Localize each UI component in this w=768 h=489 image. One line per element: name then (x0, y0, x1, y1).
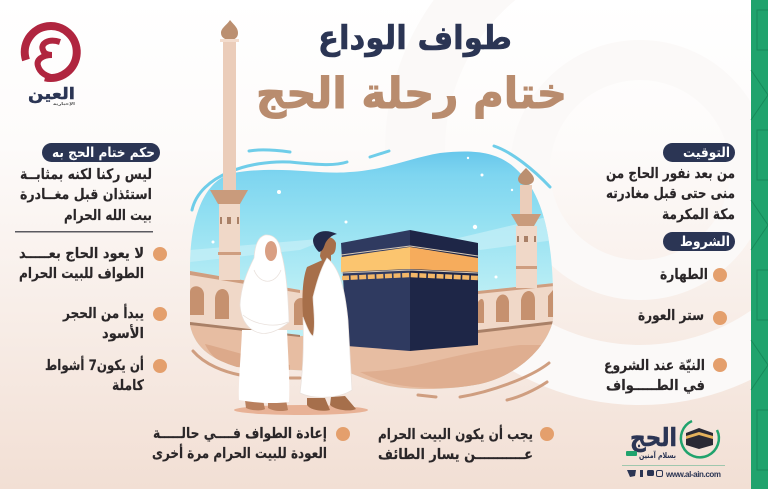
stars (212, 157, 513, 278)
title line 1: طواف الوداع (318, 18, 512, 58)
wall arches (190, 286, 553, 325)
icon: Kaaba in ring (681, 421, 719, 457)
pill heading: conditions: الشروط (680, 234, 730, 250)
shadow (234, 405, 368, 415)
item: starts from black stone: الأسود (102, 324, 144, 342)
timing text (606, 166, 735, 223)
item: no return after tawaf: لا يعود الحاج بعـــــد (19, 246, 144, 262)
item: kaaba on the left: عـــــــــــن يسار الطائف (378, 447, 533, 463)
item: seven circuits: أن يكون7 أشواط (45, 356, 144, 374)
pill heading: ruling: حكم ختام الحج به (52, 145, 155, 161)
illustration: Kaaba scene (185, 20, 560, 415)
ruling text: بيت الله الحرام (64, 208, 152, 224)
sky strokes (192, 146, 550, 210)
item: purity: الطهارة (660, 267, 708, 283)
title line 2: ختام رحلة الحج (256, 69, 567, 119)
item: repeat tawaf: العودة للبيت الحرام مرة أخرى (152, 444, 327, 462)
timing text: من بعد نفور الحاج من (606, 166, 735, 182)
green patterned strip (751, 0, 768, 489)
ruling text: ليس ركنا لكنه بمثابــة (20, 167, 152, 183)
social icons (627, 470, 662, 477)
woman pilgrim (239, 235, 289, 411)
item: intention: في الطـــــواف (606, 378, 705, 394)
item: repeat tawaf (152, 426, 350, 462)
mosque wall (190, 271, 555, 330)
item: seven circuits (45, 356, 167, 394)
logo wordmark: العين (28, 84, 75, 103)
item: intention (604, 358, 727, 394)
item: starts from black stone: يبدأ من الحجر (62, 304, 144, 322)
faint background rings (415, 0, 768, 375)
Kaaba (341, 230, 478, 351)
logo: Al-Ain (25, 26, 77, 107)
Hajj wordmark: الحج (630, 423, 677, 453)
item: kaaba on the left: يجب أن يكون البيت الحرام (378, 425, 533, 443)
right minaret (511, 168, 541, 288)
timing text: منى حتى قبل مغادرته (606, 186, 735, 202)
item: covering: ستر العورة (638, 308, 704, 324)
panel: timing (606, 143, 735, 223)
timing text: مكة المكرمة (662, 207, 735, 223)
item: no return after tawaf: الطواف للبيت الحرام (19, 266, 144, 282)
logo mark ring (25, 26, 77, 78)
floor curves (193, 351, 549, 400)
man pilgrim (300, 231, 356, 411)
item: seven circuits: كاملة (112, 378, 144, 394)
website: www.al-ain.com (665, 470, 721, 479)
item: starts from black stone (62, 304, 167, 342)
item: repeat tawaf: إعادة الطواف فــــي حالـــــة (153, 426, 327, 442)
pill heading: timing: التوقيت (683, 145, 730, 161)
item: no return after tawaf (19, 246, 167, 282)
item: kaaba on the left (378, 425, 554, 463)
ground (190, 322, 555, 395)
pill heading: conditions (663, 232, 735, 251)
ruling text: استئذان قبل مغــادرة (20, 187, 152, 203)
footer logo: Hajj (622, 421, 725, 479)
Hajj tagline: بسلام آمنين (639, 450, 676, 460)
logo mark letter (38, 41, 60, 78)
ruling text (20, 167, 152, 224)
panel: ruling (20, 143, 160, 224)
logo tagline: الإخبارية (53, 101, 76, 107)
sky blob (185, 145, 560, 395)
item: intention: النيّة عند الشروع (604, 358, 705, 374)
left minaret (210, 20, 248, 280)
